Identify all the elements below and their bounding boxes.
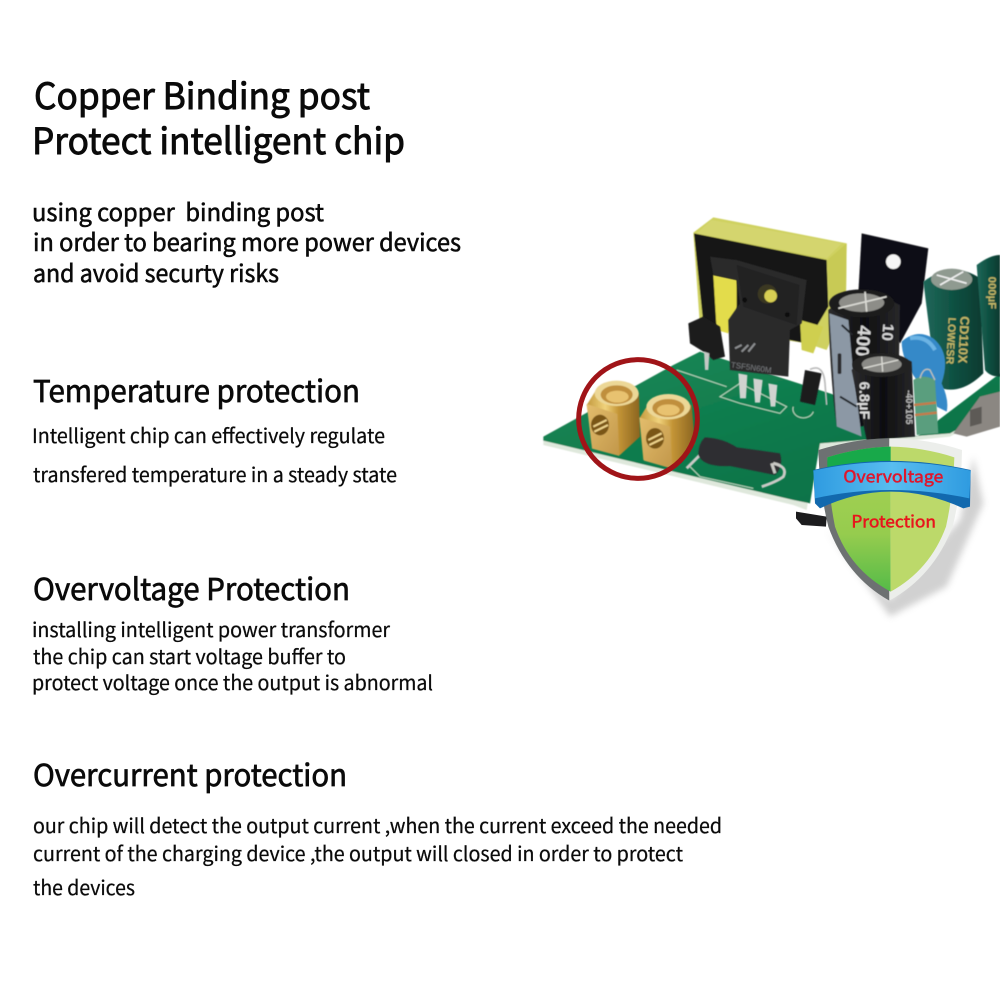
text block: overvoltage protection description: protect voltage once the output is abnormal [32,667,433,696]
small black capacitor [852,353,915,440]
inductor [913,369,938,435]
text block: overcurrent protection description [33,810,722,901]
illustration: power supply circuit board [543,217,1000,510]
heading: overvoltage protection: Overvoltage Protection [33,565,350,609]
red highlight circle [579,360,697,478]
large black capacitor [828,289,900,437]
text block: copper binding post description: in order to bearing more power devices [33,223,461,258]
circuit board [543,352,1000,510]
badge: overvoltage protection shield [796,438,983,617]
green capacitors: 000µF [985,277,997,309]
large black capacitor: 400 [852,325,875,358]
green capacitors: LOWESR [943,317,958,365]
small black capacitor: 6.8µF [855,382,871,419]
protection label: Protection [851,508,936,532]
large black capacitor: 10 [878,323,896,341]
text block: copper binding post description: using copper binding post [32,193,324,228]
green capacitors [923,255,1000,390]
ribbon with overvoltage label: Overvoltage [843,464,943,488]
green capacitors: CD110X [955,316,972,364]
copper binding post, right [639,394,695,469]
blue ceramic capacitor [902,334,947,412]
text block: overcurrent protection description: the devices [33,872,135,901]
title: copper binding post: Protect intelligent chip [32,113,405,165]
text block: overcurrent protection description: current of the charging device ,the output will closed in order to protect [33,838,683,867]
text block: copper binding post description [32,193,461,289]
text block: overvoltage protection description [32,614,433,696]
text block: temperature protection description: Intelligent chip can effectively regulate [32,420,385,449]
heading: temperature protection: Temperature protection [33,367,360,411]
text block: copper binding post description: and avoid securty risks [33,254,279,289]
title: copper binding post: Copper Binding post [34,68,370,120]
MOSFET chip [688,257,807,407]
text block: temperature protection description: transfered temperature in a steady state [33,459,397,488]
text block: overvoltage protection description: the chip can start voltage buffer to [33,641,346,670]
transformer [693,217,847,353]
copper binding post, left [587,381,640,456]
heading: overcurrent protection: Overcurrent protection [33,751,347,795]
power resistor [687,437,785,487]
small black capacitor: -40+105 [904,390,914,424]
small diode [800,368,827,405]
shield body [818,438,962,601]
ribbon with overvoltage label [813,461,971,508]
black connector under board [796,512,827,527]
title: copper binding post [32,68,405,165]
MOSFET chip: TSF5N60M [730,360,772,375]
shield shadow [827,457,983,617]
black heatsink MOSFET [858,233,928,343]
text block: overcurrent protection description: our chip will detect the output current ,when the current exceed the needed [33,810,722,839]
text block: temperature protection description [32,420,397,488]
text block: overvoltage protection description: installing intelligent power transformer [32,614,390,643]
